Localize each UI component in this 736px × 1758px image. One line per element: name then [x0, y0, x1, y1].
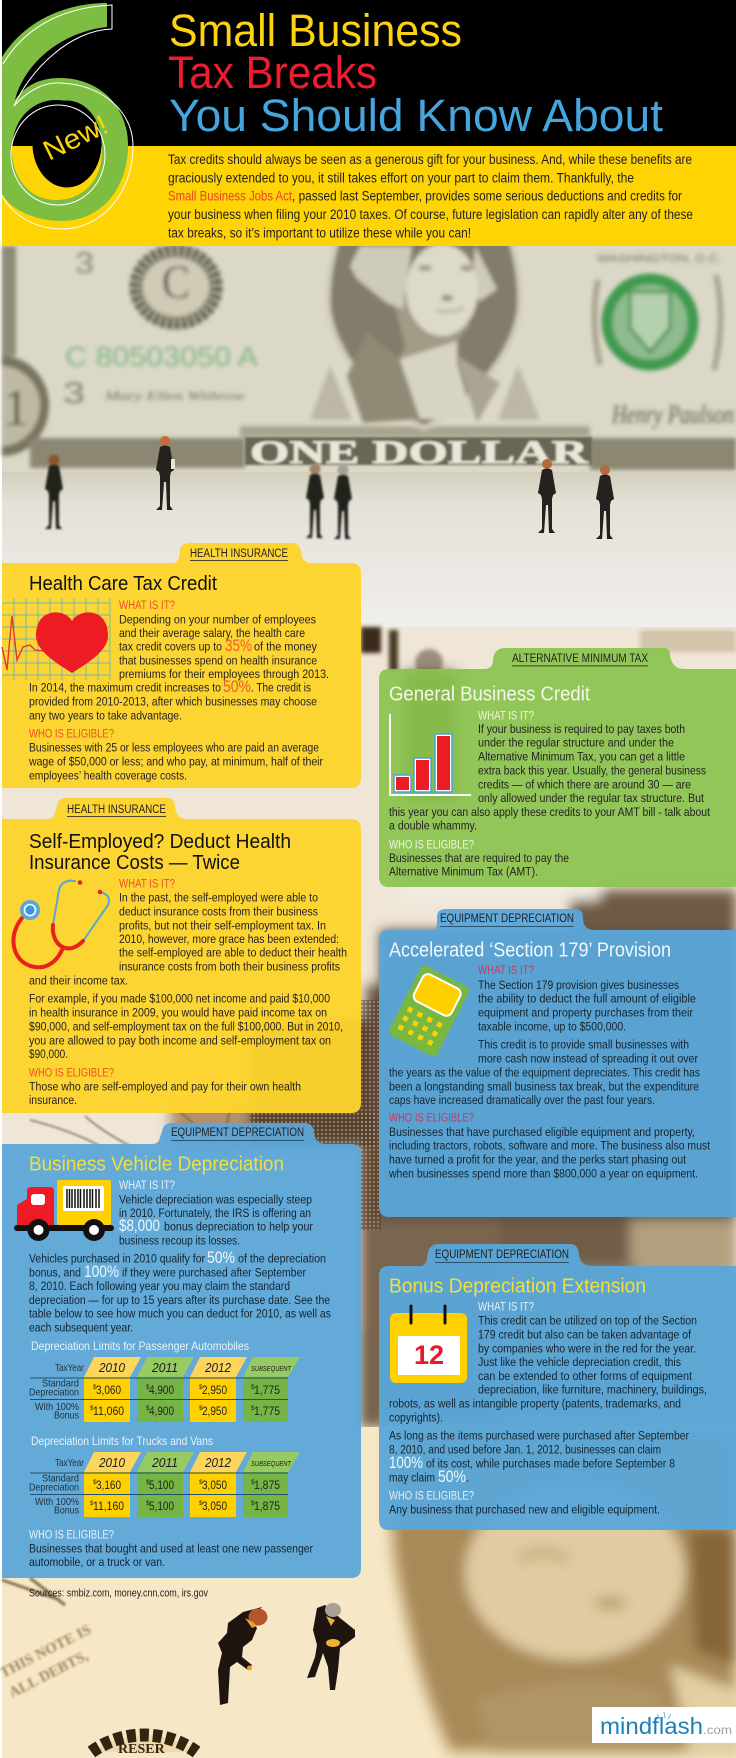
photo: dollar bill with miniature businessmen: C 80503050 A — [65, 341, 258, 372]
eligibility text: Those who are self-employed and pay for their own health — [29, 1079, 301, 1093]
table: trucks and vans: $ — [199, 1500, 203, 1507]
what is it: WHAT IS IT? — [119, 1180, 175, 1192]
panel: general business credit — [379, 648, 736, 887]
table: trucks and vans: 3,050 — [202, 1478, 227, 1492]
table: trucks and vans: 5,100 — [149, 1478, 174, 1492]
table: trucks and vans: Standard — [42, 1473, 79, 1485]
body text: of the depreciation — [238, 1251, 326, 1265]
photo: dollar bill with miniature businessmen: Mary Ellen Withrow — [104, 388, 245, 403]
body text: depreciation — for up to 15 years after its purchase date. See the — [29, 1293, 330, 1307]
table: trucks and vans: 2010 — [98, 1455, 126, 1470]
eligibility text — [29, 1542, 313, 1569]
table: trucks and vans: 2011 — [151, 1455, 178, 1470]
table: passenger automobiles: 2012 — [204, 1360, 232, 1375]
intro text: tax breaks, so it’s important to utilize these while you can! — [168, 226, 471, 240]
body text: In the past, the self-employed were able to — [119, 891, 318, 905]
icon: calendar: 12 — [414, 1340, 444, 1370]
table: passenger automobiles: 3,060 — [96, 1383, 121, 1397]
who is eligible: WHO IS ELIGIBLE? — [29, 728, 114, 740]
table: trucks and vans: 1,875 — [254, 1478, 280, 1492]
seal at bottom: RESER — [118, 1742, 166, 1757]
body text: in 2010. Fortunately, the IRS is offering an — [119, 1206, 311, 1220]
icon: calendar — [390, 1306, 467, 1383]
table: passenger automobiles: 1,775 — [254, 1383, 280, 1397]
eligibility text — [389, 851, 569, 879]
table: trucks and vans: 3,050 — [202, 1499, 227, 1513]
body text: table below to see how much you can deduct for 2010, as well as — [29, 1307, 331, 1321]
body text: bonus depreciation to help your — [164, 1220, 313, 1234]
title: You Should Know About — [169, 90, 664, 141]
intro text: graciously extended to you, it still takes effort on your part to claim them. Thankfully, the — [168, 170, 634, 186]
body text: by companies who were in the red for the year. — [478, 1341, 696, 1355]
seal at bottom — [91, 1735, 197, 1757]
blurred note lettering — [0, 1578, 94, 1702]
body text: 50% — [438, 1468, 466, 1486]
who is eligible: WHO IS ELIGIBLE? — [389, 839, 474, 851]
body text: only allowed under the regular tax structure. But — [478, 791, 705, 805]
body text: The Section 179 provision gives businesses — [478, 978, 679, 992]
what is it: WHAT IS IT? — [478, 710, 534, 722]
body text: deduct insurance costs from their business — [119, 905, 318, 919]
eligibility text — [388, 1125, 711, 1180]
eligibility text: insurance. — [29, 1093, 77, 1107]
body text: if they were purchased after September — [122, 1265, 306, 1279]
body text: 2010, however, more grace has been extended: — [119, 932, 339, 946]
table: passenger automobiles: 1,775 — [254, 1404, 280, 1418]
icon: calculator — [387, 964, 471, 1058]
body text: that businesses spend on health insurance — [119, 653, 317, 667]
tab label: EQUIPMENT DEPRECIATION — [435, 1249, 569, 1261]
photo: dollar bill with miniature businessmen: WASHINGTON, D.C. — [597, 253, 722, 265]
body text: business recoup its losses. — [119, 1233, 240, 1247]
table: trucks and vans: $ — [93, 1479, 97, 1486]
intro text: , passed last September, provides some serious deductions and credits for — [292, 189, 682, 204]
header: black title band and yellow intro band — [2, 0, 736, 246]
table: trucks and vans: SUBSEQUENT — [251, 1461, 292, 1468]
table: passenger automobiles: 4,900 — [149, 1404, 174, 1418]
table: passenger automobiles: 11,060 — [93, 1404, 124, 1418]
body text: bonus, and — [29, 1265, 81, 1279]
tab label: EQUIPMENT DEPRECIATION — [171, 1127, 304, 1139]
body text — [29, 1192, 331, 1335]
table: passenger automobiles — [29, 1339, 300, 1422]
blurred note lettering: ALL DEBTS, — [7, 1648, 91, 1702]
body text: Depending on your number of employees — [119, 612, 316, 626]
body text — [389, 1314, 707, 1486]
title — [168, 5, 664, 141]
body text: insurance costs from both their business profits — [119, 960, 340, 974]
blurred banknote portrait — [390, 1430, 736, 1752]
panel: bonus depreciation extension — [379, 1244, 736, 1530]
ONE DOLLAR band — [245, 435, 592, 471]
tab label: HEALTH INSURANCE — [190, 548, 288, 560]
icon: heart with ECG on grid — [2, 598, 110, 680]
photo: tan dollar bill behind the panels — [2, 627, 736, 1427]
table: passenger automobiles: $ — [93, 1384, 97, 1391]
eligibility text: Businesses that bought and used at least one new passenger — [29, 1542, 313, 1556]
eligibility text: Alternative Minimum Tax (AMT). — [389, 865, 538, 879]
table: trucks and vans: $ — [146, 1500, 150, 1507]
heading: General Business Credit — [389, 684, 590, 706]
table: trucks and vans: TaxYear — [55, 1457, 84, 1469]
body text: the ability to deduct the full amount of eligible — [478, 992, 696, 1006]
eligibility text: Businesses that have purchased eligible equipment and property, — [389, 1125, 695, 1139]
sources: Sources: smbiz.com, money.cnn.com, irs.gov — [29, 1588, 208, 1600]
body text: $90,000. — [29, 1047, 68, 1061]
body text: 179 credit but also can be taken advantage of — [478, 1327, 692, 1341]
who is eligible: WHO IS ELIGIBLE? — [389, 1490, 474, 1502]
body text: 100% — [389, 1454, 423, 1472]
body text: This credit is to provide small businesses with — [478, 1038, 689, 1052]
table: passenger automobiles: 4,900 — [149, 1383, 174, 1397]
eligibility text: Businesses that are required to pay the — [389, 851, 569, 865]
body text: and their income tax. — [29, 974, 128, 988]
photo: dollar bill with miniature businessmen — [2, 155, 736, 628]
body text: profits, but not their self-employment tax. In — [119, 918, 326, 932]
body text: If your business is required to pay taxes both — [478, 722, 685, 736]
who is eligible: WHO IS ELIGIBLE? — [29, 1068, 114, 1080]
body text: 50% — [207, 1249, 235, 1267]
table: passenger automobiles: $ — [251, 1384, 255, 1391]
heading: Bonus Depreciation Extension — [389, 1275, 646, 1297]
body text: and their average salary, the health care — [119, 626, 305, 640]
body text: Just like the vehicle depreciation credit, this — [478, 1355, 681, 1369]
icon: stethoscope — [13, 880, 109, 967]
body text: in health insurance in 2009, you would have paid income tax on — [29, 1006, 327, 1020]
table: passenger automobiles: $ — [199, 1384, 203, 1391]
body text: . The credit is — [251, 681, 311, 695]
table: passenger automobiles: TaxYear — [55, 1362, 84, 1374]
eligibility text: wage of $50,000 or less; and who pay, at minimum, half of their — [28, 754, 323, 768]
intro text — [168, 152, 693, 240]
icon: bar chart — [390, 714, 471, 795]
icon: delivery truck with barcode — [14, 1180, 114, 1241]
body text: credits — of which there are around 30 — are — [478, 777, 691, 791]
body text: more cash now instead of spreading it out over — [478, 1052, 698, 1066]
body text: equipment and property purchases from their — [478, 1006, 693, 1020]
photo: dollar bill with miniature businessmen: 1 — [3, 380, 29, 437]
figures: miniature businessmen talking — [306, 464, 352, 539]
figure: bottom businessman looking down — [218, 1607, 268, 1705]
panel: business vehicle depreciation — [2, 1123, 361, 1578]
heading: Business Vehicle Depreciation — [29, 1154, 284, 1176]
table: passenger automobiles: 2011 — [151, 1360, 178, 1375]
photo: dollar bill with miniature businessmen: 3 — [75, 247, 94, 280]
eligibility text: Businesses with 25 or less employees who are paid an average — [29, 741, 319, 755]
panel: self-employed health insurance — [2, 798, 361, 1113]
body text — [389, 722, 711, 833]
body text: a double whammy. — [389, 819, 477, 833]
heading: Self-Employed? Deduct Health — [29, 831, 291, 853]
body text — [29, 612, 329, 722]
table: passenger automobiles: With 100% — [35, 1401, 79, 1413]
body text: of the money — [254, 640, 318, 654]
logo: mindflash.com: mindflash — [600, 1713, 703, 1739]
heading: Health Care Tax Credit — [29, 573, 217, 595]
table: trucks and vans: $ — [90, 1500, 94, 1507]
body text: may claim — [389, 1470, 435, 1484]
photo: dollar bill with miniature businessmen: 3 — [63, 377, 85, 410]
table: passenger automobiles: $ — [90, 1405, 94, 1412]
tab label: HEALTH INSURANCE — [67, 804, 166, 816]
heading: Accelerated ‘Section 179’ Provision — [389, 940, 671, 962]
eligibility text — [29, 1079, 301, 1107]
body text: premiums for their employees through 2013. — [119, 667, 329, 681]
body text: $8,000 — [119, 1217, 160, 1235]
table: passenger automobiles: $ — [251, 1405, 255, 1412]
body text: . — [466, 1470, 469, 1484]
tab label: EQUIPMENT DEPRECIATION — [440, 913, 574, 925]
body text: In 2014, the maximum credit increases to — [29, 681, 221, 695]
body text: taxable income, up to $500,000. — [478, 1019, 626, 1033]
ONE DOLLAR band: ONE DOLLAR — [250, 435, 590, 471]
what is it: WHAT IS IT? — [478, 965, 534, 977]
body text: 100% — [84, 1263, 119, 1281]
body text: 35% — [225, 637, 252, 655]
table: passenger automobiles: SUBSEQUENT — [251, 1366, 292, 1373]
big numeral 6 with New! badge: New! — [38, 109, 113, 166]
table: passenger automobiles: Depreciation — [29, 1386, 79, 1398]
body text: the self-employed are able to deduct their health — [119, 946, 347, 960]
body text: you are allowed to pay both income and self-employment tax on — [29, 1033, 331, 1047]
table: trucks and vans: $ — [251, 1479, 255, 1486]
body text: 8, 2010, and used before Jan. 1, 2012, businesses can claim — [389, 1443, 661, 1457]
table: trucks and vans: 5,100 — [149, 1499, 174, 1513]
who is eligible: WHO IS ELIGIBLE? — [389, 1113, 474, 1125]
table: trucks and vans: 1,875 — [254, 1499, 280, 1513]
body text: Vehicles purchased in 2010 qualify for — [29, 1251, 205, 1265]
body text — [29, 891, 347, 1061]
body text: 50% — [223, 678, 251, 696]
photo: sepia portrait and note at bottom — [0, 1427, 736, 1758]
body text: copyrights). — [389, 1410, 443, 1424]
logo: mindflash.com: .com — [703, 1723, 732, 1737]
body text: Alternative Minimum Tax, you can get a little — [478, 750, 685, 764]
eligibility text — [28, 741, 323, 782]
table: passenger automobiles: Standard — [42, 1378, 79, 1390]
table: trucks and vans: 3,160 — [96, 1478, 121, 1492]
panel: accelerated section 179 provision — [379, 909, 736, 1217]
figure: miniature businessman 2 — [156, 436, 175, 510]
body text: caps have increased dramatically over the past four years. — [389, 1093, 655, 1107]
figure: bottom businessman standing — [307, 1603, 355, 1690]
photo: dollar bill with miniature businessmen: C — [162, 256, 190, 309]
figure: miniature businessman 6 — [596, 465, 614, 539]
tab label: ALTERNATIVE MINIMUM TAX — [512, 653, 648, 665]
body text: This credit can be utilized on top of the Section — [478, 1314, 697, 1328]
logo: mindflash.com — [592, 1707, 736, 1743]
panel: health care tax credit — [2, 543, 361, 788]
table: passenger automobiles: 2,950 — [202, 1404, 227, 1418]
table: trucks and vans: With 100% — [35, 1496, 79, 1508]
table: trucks and vans: 11,160 — [93, 1499, 124, 1513]
table: trucks and vans — [29, 1434, 300, 1517]
body text: 8, 2010. Each following year you may claim the standard — [29, 1279, 290, 1293]
table: passenger automobiles: Depreciation Limits for Passenger Automobiles — [31, 1339, 249, 1353]
heading — [29, 831, 291, 874]
table: passenger automobiles: $ — [199, 1405, 203, 1412]
body text: As long as the items purchased were purchased after September — [389, 1429, 689, 1443]
eligibility text: employees’ health coverage costs. — [29, 768, 187, 782]
portrait of Washington — [328, 155, 520, 428]
body text: tax credit covers up to — [119, 640, 222, 654]
figure: miniature businessman 1 — [45, 454, 63, 529]
what is it: WHAT IS IT? — [119, 879, 175, 891]
eligibility text: automobile, or a truck or van. — [29, 1555, 165, 1569]
body text: Vehicle depreciation was especially steep — [119, 1192, 312, 1206]
what is it: WHAT IS IT? — [119, 600, 175, 612]
body text: any two years to take advantage. — [29, 708, 182, 722]
blurred note lettering: THIS NOTE IS — [0, 1622, 94, 1682]
body text: can be extended to other forms of equipment — [478, 1369, 693, 1383]
table: trucks and vans: Depreciation Limits for Trucks and Vans — [31, 1434, 213, 1448]
table: trucks and vans: 2012 — [204, 1455, 232, 1470]
figure: miniature businessman 5 — [538, 459, 556, 533]
big numeral 6 with New! badge — [2, 3, 133, 229]
table: passenger automobiles: 2010 — [98, 1360, 126, 1375]
title: Tax Breaks — [168, 47, 377, 98]
eligibility text: have turned a profit for the year, and the perks start phasing out — [389, 1152, 687, 1166]
body text: For example, if you made $100,000 net income and paid $10,000 — [29, 992, 330, 1006]
table: passenger automobiles: $ — [146, 1384, 150, 1391]
body text: under the regular structure and under the — [478, 736, 674, 750]
body text: robots, as well as intangible property (patents, trademarks, and — [389, 1397, 681, 1411]
table: passenger automobiles: Bonus — [54, 1410, 79, 1422]
eligibility text: Any business that purchased new and eligible equipment. — [389, 1502, 660, 1516]
table: passenger automobiles: 2,950 — [202, 1383, 227, 1397]
table: trucks and vans: Depreciation — [29, 1481, 79, 1493]
table: trucks and vans: $ — [146, 1479, 150, 1486]
what is it: WHAT IS IT? — [478, 1302, 534, 1314]
body text — [389, 978, 700, 1107]
body text: depreciation, like furniture, machinery, buildings, — [478, 1383, 707, 1397]
table: trucks and vans: $ — [199, 1479, 203, 1486]
title: Small Business — [169, 5, 462, 56]
who is eligible: WHO IS ELIGIBLE? — [29, 1529, 114, 1541]
table: trucks and vans: $ — [251, 1500, 255, 1507]
intro text: Small Business Jobs Act — [168, 189, 292, 204]
table: trucks and vans: Bonus — [54, 1505, 79, 1517]
body text: each subsequent year. — [29, 1321, 133, 1335]
body text: of its cost, while purchases made before September 8 — [426, 1456, 675, 1470]
body text: $90,000, and self-employment tax on the full $100,000. But in 2010, — [29, 1019, 343, 1033]
heading: Insurance Costs — Twice — [29, 852, 240, 874]
body text: provided from 2010-2013, after which businesses may choose — [29, 695, 317, 709]
table: passenger automobiles: $ — [146, 1405, 150, 1412]
